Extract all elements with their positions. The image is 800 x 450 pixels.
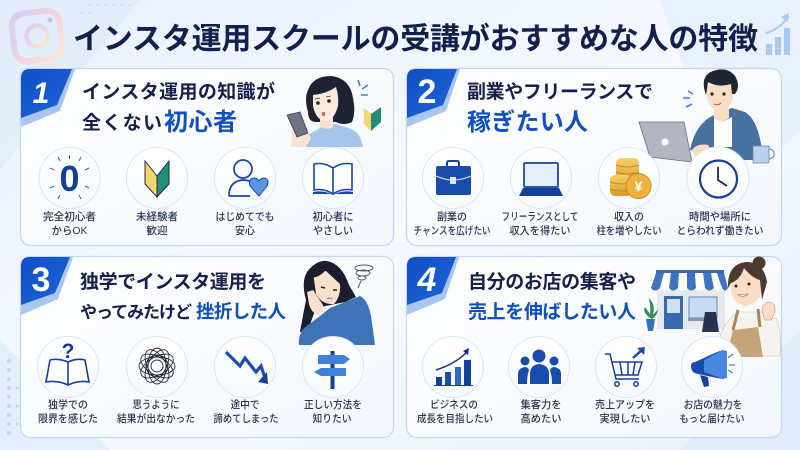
illustration: man with laptop (639, 69, 774, 163)
title: インスタ運用スクールの受講がおすすめな人の特徴 (73, 22, 758, 56)
panel 2: side job (406, 68, 782, 246)
item: beginner mark: 未経験者 (136, 210, 178, 223)
item: megaphone: もっと届けたい (680, 413, 744, 425)
item: from zero: 0 (59, 158, 80, 199)
item: people: 集客力を (520, 398, 562, 411)
item: reassurance: はじめてでも (216, 211, 274, 223)
item: book with question (38, 336, 98, 425)
item: coins: 柱を増やしたい (596, 224, 662, 237)
item: megaphone (680, 336, 744, 425)
item: laptop: 収入を得たい (510, 224, 570, 237)
item: falling arrow: 途中で (230, 398, 260, 411)
item: tangled thread (117, 336, 195, 425)
item: book with question: 限界を感じた (38, 412, 98, 425)
item: book with question: 独学での (48, 398, 88, 411)
item: signpost (302, 336, 364, 425)
item: briefcase: チャンスを広げたい (414, 225, 490, 237)
item: clock: とらわれず働きたい (676, 224, 764, 237)
item: reassurance: 安心 (235, 224, 255, 237)
item: people: 高めたい (520, 412, 562, 425)
item: growth chart (417, 336, 493, 425)
illustration: shop owner (718, 256, 780, 357)
item: open book (302, 148, 364, 237)
item: clock: 時間や場所に (689, 210, 751, 223)
item: beginner mark: 歓迎 (146, 224, 168, 237)
item: growth chart: ビジネスの (430, 398, 478, 411)
item: laptop: フリーランスとして (502, 211, 578, 223)
heading 2 (467, 81, 653, 136)
item: open book: 初心者に (312, 210, 354, 223)
heading 3: やってみたけど (80, 303, 192, 322)
illustration: frustrated woman (299, 261, 375, 345)
item: from zero: からOK (52, 225, 88, 237)
item: coins (596, 148, 662, 237)
item: reassurance (214, 148, 276, 237)
item: shopping cart (595, 336, 656, 425)
heading 3: 独学でインスタ運用を (80, 270, 266, 293)
panel 4: store owner (406, 256, 782, 438)
heading 3: 挫折した人 (196, 301, 286, 322)
item: beginner mark (126, 148, 188, 237)
badge 1 (21, 69, 75, 127)
badge 1: 1 (33, 77, 49, 110)
item: briefcase: 副業の (437, 210, 467, 223)
item: book with question: ? (62, 340, 74, 363)
item: briefcase (414, 148, 490, 237)
illustration: shop (644, 270, 728, 332)
item: laptop (502, 148, 578, 237)
item: shopping cart: 売上アップを (595, 398, 655, 411)
item: megaphone: お店の魅力を (684, 398, 742, 411)
heading 1 (82, 80, 275, 136)
icon: growth chart (766, 13, 790, 55)
heading 3 (80, 270, 286, 322)
badge 3: 3 (32, 261, 50, 299)
icon: instagram logo (10, 9, 64, 63)
item: coins: ¥ (635, 178, 643, 194)
panel 3: gave up (20, 256, 394, 438)
heading 1: 全くない (82, 112, 162, 134)
item: tangled thread: 結果が出なかった (117, 412, 195, 425)
heading 4: 自分のお店の集客や (468, 271, 636, 293)
heading 2: 稼ぎたい人 (467, 108, 588, 136)
item: people (508, 336, 570, 425)
item: clock (676, 147, 764, 237)
badge 4 (407, 257, 459, 315)
item: tangled thread: 思うように (132, 399, 180, 411)
badge 3 (21, 257, 73, 315)
item: signpost: 正しい方法を (304, 398, 362, 411)
heading 1: 初心者 (164, 109, 237, 136)
heading 2: 副業やフリーランスで (467, 81, 653, 103)
item: growth chart: 成長を目指したい (417, 412, 493, 425)
item: from zero: 完全初心者 (43, 210, 96, 223)
item: coins: 収入の (614, 211, 644, 223)
badge 2 (407, 69, 460, 127)
illustration: woman with phone (287, 76, 381, 147)
heading 4: 売上を伸ばしたい人 (468, 301, 636, 323)
item: shopping cart: 実現したい (600, 412, 650, 425)
badge 2: 2 (418, 73, 436, 111)
item: falling arrow: 諦めてしまった (214, 412, 278, 425)
item: signpost: 知りたい (312, 412, 352, 425)
item: falling arrow (214, 336, 278, 425)
item: from zero (39, 148, 100, 237)
heading 4 (468, 271, 636, 323)
badge 4: 4 (417, 261, 437, 299)
heading 1: インスタ運用の知識が (82, 80, 275, 103)
item: open book: やさしい (313, 225, 353, 237)
panel 1: beginner (20, 68, 394, 246)
